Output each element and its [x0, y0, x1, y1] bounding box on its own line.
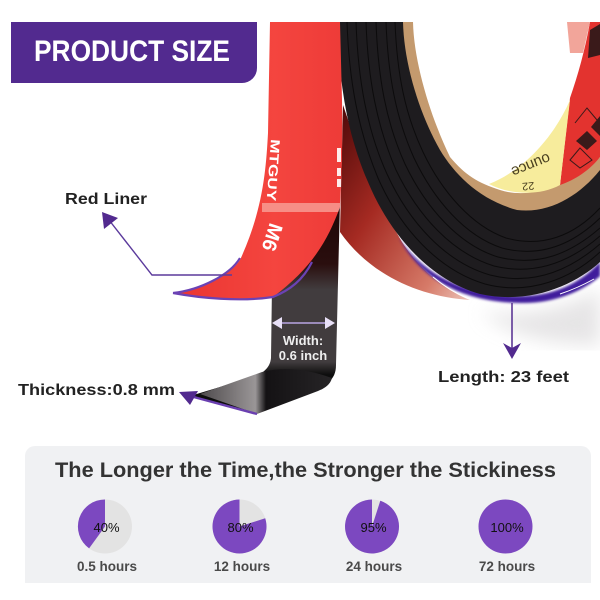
- inner yellow label: [489, 100, 570, 193]
- pie: 95% at 24 hours: 24 hours: [346, 559, 402, 574]
- liner print: [262, 140, 341, 251]
- pie: 40% at 0.5 hours: 0.5 hours: [77, 559, 137, 574]
- callout: width: Width:: [283, 333, 323, 348]
- red back of tape: [340, 105, 470, 300]
- pie: 100% at 72 hours: 100%: [490, 520, 524, 535]
- pie: 40% at 0.5 hours: [77, 499, 137, 574]
- purple edge of foot: [190, 396, 257, 414]
- pie: 95% at 24 hours: [345, 500, 402, 574]
- pie: 80% at 12 hours: 12 hours: [214, 559, 270, 574]
- hanging tape strip: [173, 22, 342, 414]
- black underside: [190, 200, 340, 413]
- header banner: product size: [11, 22, 257, 83]
- callout: thickness: Thickness:0.8 mm: [18, 382, 175, 399]
- pie: 80% at 12 hours: 80%: [227, 520, 254, 535]
- white highlight in purple band: [433, 277, 594, 298]
- tape roll: [337, 22, 600, 345]
- floor shadow: [480, 290, 600, 345]
- callout: length: [438, 303, 570, 386]
- pie: 95% at 24 hours: 95%: [360, 520, 387, 535]
- pie: 100% at 72 hours: 72 hours: [479, 559, 535, 574]
- liner print: MTGUY: [264, 139, 283, 202]
- printed text on inner label: 22: [522, 179, 535, 192]
- callout: red liner: [65, 191, 232, 275]
- black roll face: [337, 22, 600, 297]
- callout: length: Length: 23 feet: [438, 369, 570, 386]
- printed text on inner label: ounce: [509, 149, 553, 180]
- callout: thickness: [18, 382, 198, 405]
- pink torn liner: [567, 22, 590, 53]
- folded foot: [200, 369, 332, 414]
- cardboard core: [403, 22, 600, 211]
- inner label pattern: [570, 24, 600, 168]
- callout: width: [272, 317, 335, 363]
- panel heading: The Longer the Time,the Stronger the Stickiness: [55, 458, 556, 482]
- panel: stickiness over time: [25, 446, 591, 583]
- red liner: [173, 22, 342, 299]
- callout: width: 0.6 inch: [279, 348, 327, 363]
- pie: 80% at 12 hours: [212, 500, 270, 574]
- roll layer lines: [347, 22, 600, 288]
- purple glow beneath roll: [398, 236, 600, 303]
- purple liner edge: [173, 258, 312, 299]
- white centre hole: [413, 22, 600, 193]
- callout: red liner: Red Liner: [65, 191, 147, 208]
- pie: 100% at 72 hours: [478, 500, 535, 574]
- pie: 40% at 0.5 hours: 40%: [93, 520, 120, 535]
- inner red label: [560, 22, 600, 185]
- liner print: M6: [257, 220, 286, 254]
- header banner: product size: PRODUCT SIZE: [34, 35, 230, 68]
